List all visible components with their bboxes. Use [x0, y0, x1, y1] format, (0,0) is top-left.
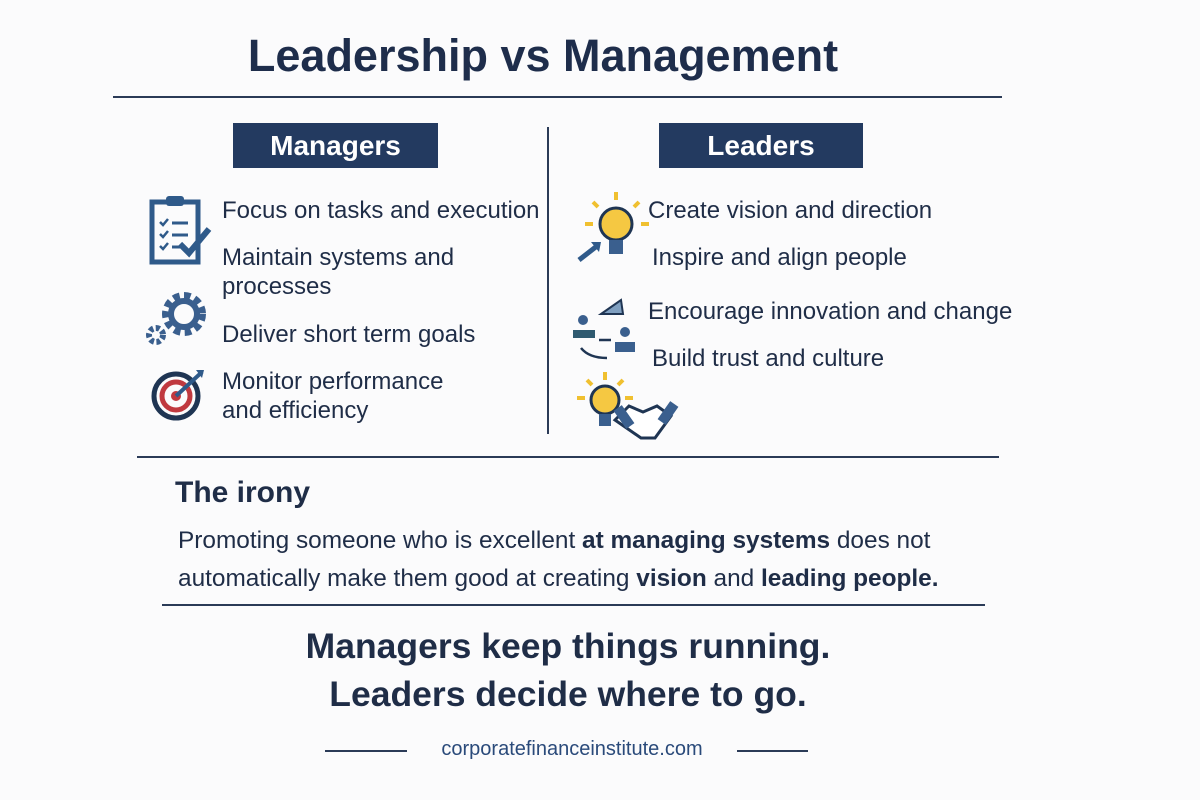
callout: conclusion: Leaders decide where to go.: [329, 674, 807, 714]
text block: irony paragraph: [178, 527, 939, 592]
text: Focus on tasks and execution: [222, 197, 540, 224]
text: and efficiency: [222, 397, 368, 424]
text: Encourage innovation and change: [648, 298, 1012, 325]
icon: target: [152, 370, 204, 420]
icon: lightbulb with arrow: [578, 192, 649, 262]
text: Create vision and direction: [648, 197, 932, 224]
text: Monitor performance: [222, 368, 443, 395]
heading: the irony: The irony: [175, 476, 310, 509]
text: [222, 368, 443, 424]
footer: corporatefinanceinstitute.com: [441, 738, 703, 760]
icon: gears: [146, 292, 206, 345]
panel: managers list: [146, 196, 540, 424]
heading: Leaders: Leaders: [707, 130, 815, 161]
icon: people change: [573, 298, 635, 360]
text: Build trust and culture: [652, 345, 884, 372]
heading: Managers: Managers: [270, 130, 401, 161]
text: Deliver short term goals: [222, 321, 475, 348]
text block: irony paragraph: Promoting someone who is excellent at managing systems does not: [178, 527, 930, 554]
text: Inspire and align people: [652, 244, 907, 271]
text: [222, 244, 454, 300]
text: Maintain systems and: [222, 244, 454, 271]
callout: conclusion: [306, 626, 830, 714]
icon: clipboard: [150, 196, 212, 264]
callout: conclusion: Managers keep things running.: [306, 626, 830, 666]
heading: Managers: [233, 123, 438, 168]
text block: irony paragraph: automatically make them good at creating vision and leading people.: [178, 565, 939, 592]
icon: lightbulb and handshake: [577, 372, 678, 440]
text: processes: [222, 273, 331, 300]
title: Leadership vs Management: [248, 30, 838, 81]
heading: Leaders: [659, 123, 863, 168]
panel: leaders list: [573, 192, 1012, 440]
